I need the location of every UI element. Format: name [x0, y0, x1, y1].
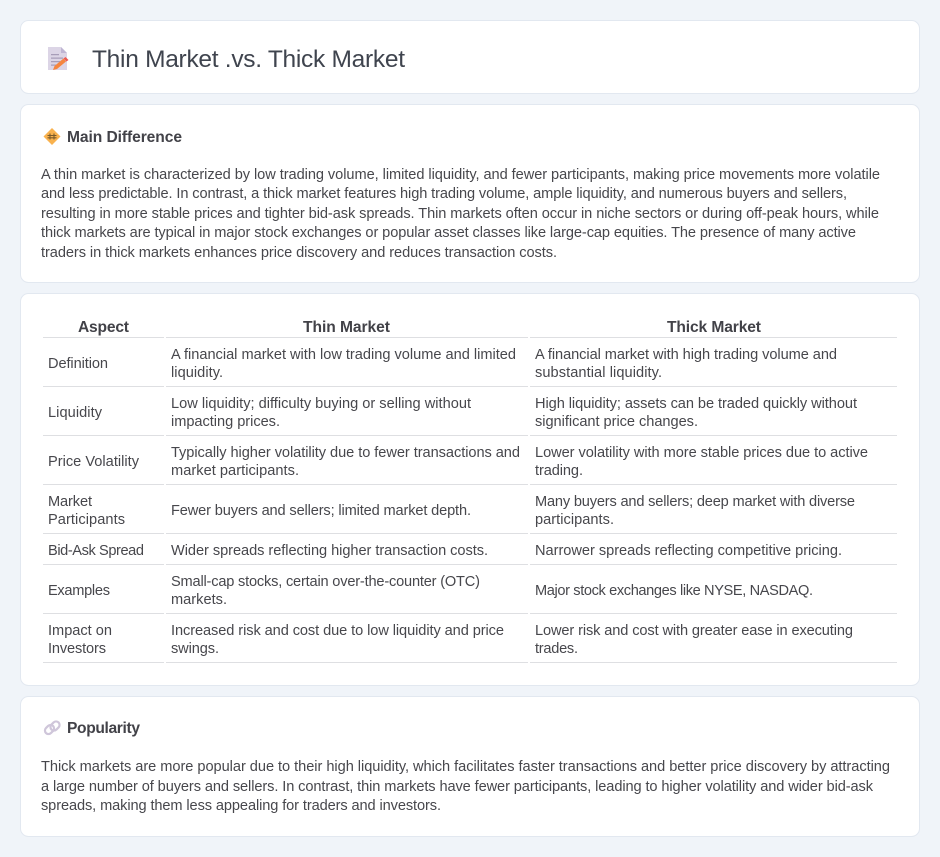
row: impact on investors: trades.	[535, 641, 578, 657]
panel: popularity	[20, 696, 920, 836]
row: definition: substantial liquidity.	[535, 365, 662, 381]
row: impact on investors: Increased risk and cost due to low liquidity and price	[171, 623, 504, 639]
text block: popularity paragraph	[41, 759, 890, 814]
row: liquidity: Low liquidity; difficulty buying or selling without	[171, 396, 471, 412]
row: definition: liquidity.	[171, 365, 223, 381]
icon: chain link	[43, 720, 61, 736]
row: definition	[43, 347, 897, 387]
text block: main difference paragraph: traders in thick markets enhances price discovery and reduces transaction costs.	[41, 245, 557, 261]
table header row: Thin Market	[303, 319, 390, 336]
row: price volatility: market participants.	[171, 463, 299, 479]
row: market participants: Market	[48, 494, 92, 510]
text block: main difference paragraph: thick markets are typical in major stock exchanges or popular asset classes like large-cap equities. The presence of many active	[41, 225, 856, 241]
row: bid-ask spread	[43, 543, 897, 565]
row: examples: Small-cap stocks, certain over-the-counter (OTC)	[171, 574, 480, 590]
row: liquidity	[43, 396, 897, 436]
row: price volatility	[43, 445, 897, 485]
row: examples: Major stock exchanges like NYSE, NASDAQ.	[535, 583, 813, 599]
table header row: Thick Market	[667, 319, 761, 336]
row: market participants: Fewer buyers and sellers; limited market depth.	[171, 503, 471, 519]
row: definition: A financial market with low trading volume and limited	[171, 347, 516, 363]
icon: document with pencil	[48, 47, 68, 70]
row: impact on investors: swings.	[171, 641, 219, 657]
table header row: Aspect	[78, 319, 129, 336]
panel: main difference	[20, 104, 920, 282]
row: impact on investors: Impact on	[48, 623, 112, 639]
row: market participants	[43, 494, 897, 534]
row: examples: markets.	[171, 592, 227, 608]
text block: main difference paragraph: and less predictable. In contrast, a thick market features high trading volume, ample liquidity, and numerous buyers and sellers,	[41, 186, 847, 202]
row: definition: A financial market with high trading volume and	[535, 347, 837, 363]
row: bid-ask spread: Wider spreads reflecting higher transaction costs.	[171, 543, 488, 559]
text block: popularity paragraph: Thick markets are more popular due to their high liquidity, which facilitates faster transactions and better price discovery by attracting	[41, 759, 890, 775]
row: price volatility: trading.	[535, 463, 583, 479]
row: impact on investors: Investors	[48, 641, 106, 657]
row: examples: Examples	[48, 583, 110, 599]
row: liquidity: impacting prices.	[171, 414, 280, 430]
panel: comparison table	[20, 294, 920, 686]
table header row	[43, 319, 897, 338]
heading: main difference: Main Difference	[67, 129, 182, 146]
row: price volatility: Lower volatility with more stable prices due to active	[535, 445, 868, 461]
row: market participants: participants.	[535, 512, 614, 528]
text block: main difference paragraph: A thin market is characterized by low trading volume, limited liquidity, and fewer participants, making price movements more volatile	[41, 167, 880, 183]
text block: main difference paragraph	[41, 167, 880, 261]
row: definition: Definition	[48, 356, 108, 372]
row: market participants: Participants	[48, 512, 125, 528]
title: Thin Market .vs. Thick Market	[92, 46, 405, 73]
row: impact on investors	[43, 623, 897, 663]
row: bid-ask spread: Narrower spreads reflecting competitive pricing.	[535, 543, 842, 559]
text block: main difference paragraph: resulting in more stable prices and tighter bid-ask spreads. Thin markets often occur in niche sectors or during off-peak hours, while	[41, 206, 879, 222]
row: price volatility: Typically higher volatility due to fewer transactions and	[171, 445, 520, 461]
row: market participants: Many buyers and sellers; deep market with diverse	[535, 494, 855, 510]
icon: orange diamond	[44, 128, 60, 145]
row: impact on investors: Lower risk and cost with greater ease in executing	[535, 623, 853, 639]
text block: popularity paragraph: spreads, making them less appealing for traders and investors.	[41, 798, 441, 814]
row: liquidity: Liquidity	[48, 405, 103, 421]
row: liquidity: significant price changes.	[535, 414, 698, 430]
heading: popularity: Popularity	[67, 720, 140, 737]
row: price volatility: Price Volatility	[48, 454, 140, 470]
panel: header	[20, 20, 920, 94]
row: bid-ask spread: Bid-Ask Spread	[48, 543, 144, 559]
row: liquidity: High liquidity; assets can be traded quickly without	[535, 396, 857, 412]
row: examples	[43, 574, 897, 614]
text block: popularity paragraph: a large number of buyers and sellers. In contrast, thin markets have fewer participants, leading to higher volatility and wider bid-ask	[41, 779, 874, 795]
